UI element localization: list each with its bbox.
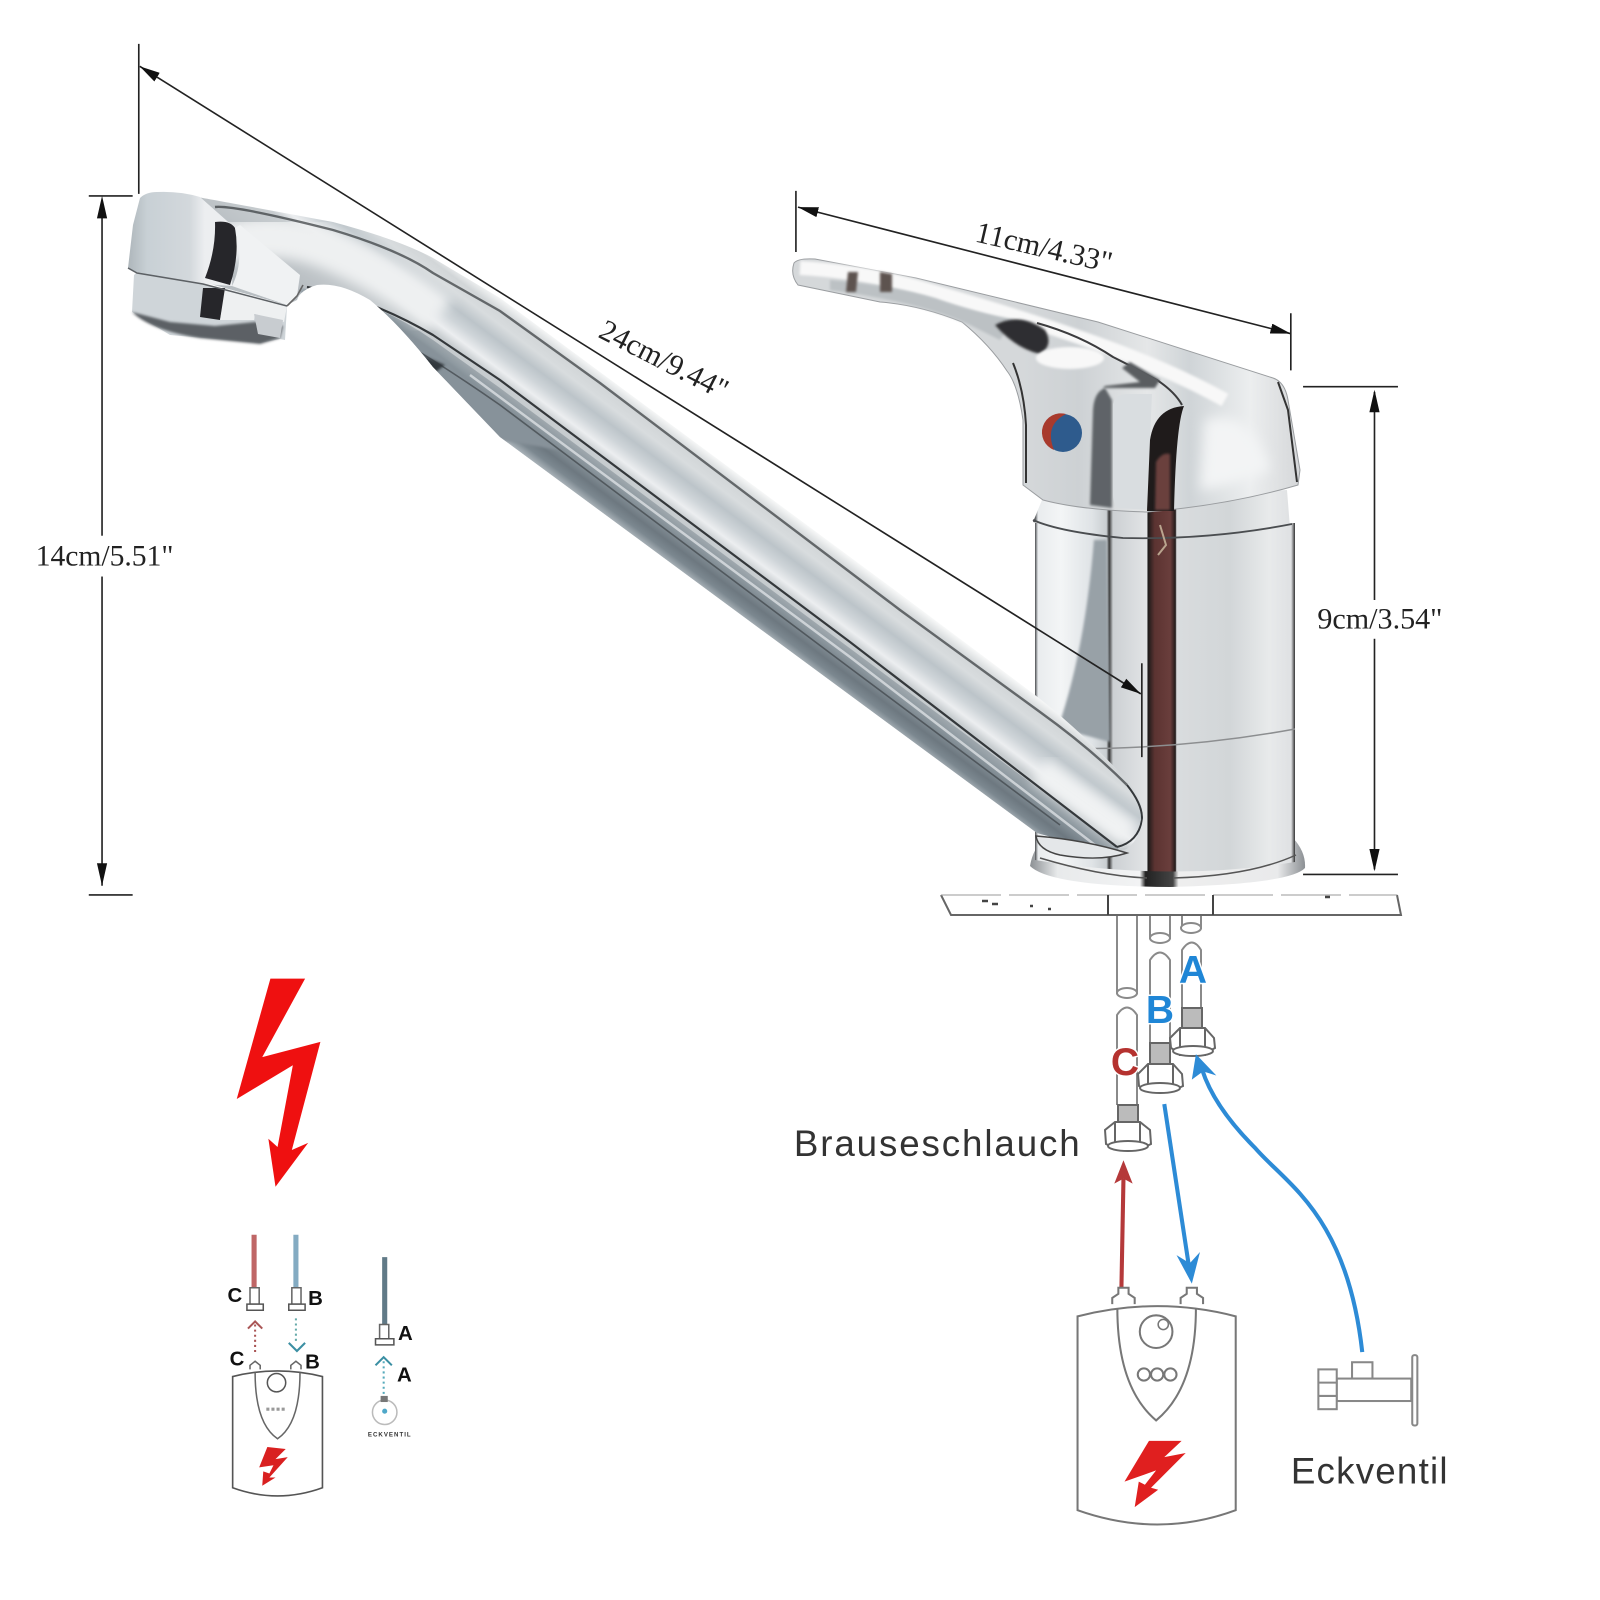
spout arm (128, 192, 1143, 860)
dimension: 14cm height: 14cm/5.51" (36, 538, 173, 572)
spout head and aerator (128, 192, 303, 344)
small labels: C (230, 1348, 245, 1370)
small labels: B (305, 1351, 320, 1373)
dimension: 24cm length (140, 66, 1142, 757)
dimension: 11cm lever (796, 191, 1291, 370)
label: Brauseschlauch: Brauseschlauch (794, 1123, 1082, 1164)
small labels (228, 1285, 413, 1387)
small labels: C (228, 1285, 243, 1307)
handle cap and lever (793, 259, 1300, 512)
connector labels A B C: B (1146, 989, 1174, 1032)
countertop (941, 895, 1401, 915)
arrow: hot water to hose (1114, 1160, 1133, 1288)
small tubes and fittings (247, 1235, 394, 1345)
pipes and connectors (1105, 916, 1215, 1151)
small labels: B (308, 1288, 323, 1310)
small water heater (233, 1361, 322, 1496)
faucet body cylinder (1030, 490, 1305, 887)
connector labels A B C: C (1111, 1041, 1139, 1084)
dimension: 9cm body: 9cm/3.54" (1317, 602, 1442, 636)
arrow: cold water to heater (1164, 1104, 1200, 1284)
spout mounting collar (1036, 836, 1127, 858)
dimension: 9cm body (1303, 387, 1449, 874)
small angle valve icon (368, 1396, 412, 1439)
dimension: 14cm height (31, 44, 179, 895)
faucet (128, 192, 1401, 1151)
small labels: A (398, 1323, 413, 1345)
dimension: 11cm lever: 11cm/4.33" (972, 215, 1116, 279)
small arrows (248, 1318, 392, 1394)
small angle valve icon: ECKVENTIL (368, 1432, 412, 1439)
connector labels A B C (1111, 949, 1207, 1084)
icon: large lightning bolt (237, 979, 320, 1187)
small wiring diagram (228, 1235, 413, 1496)
dimension: 24cm length: 24cm/9.44" (594, 313, 734, 407)
small labels: A (397, 1365, 412, 1387)
arrow: angle valve to connector A (1192, 1054, 1362, 1352)
water heater large (1078, 1288, 1236, 1524)
angle valve (1318, 1355, 1417, 1426)
hot/cold indicator (1042, 413, 1082, 452)
connector labels A B C: A (1179, 949, 1207, 992)
icon: small lightning on heater (1124, 1441, 1186, 1507)
label: Eckventil: Eckventil (1291, 1451, 1449, 1492)
